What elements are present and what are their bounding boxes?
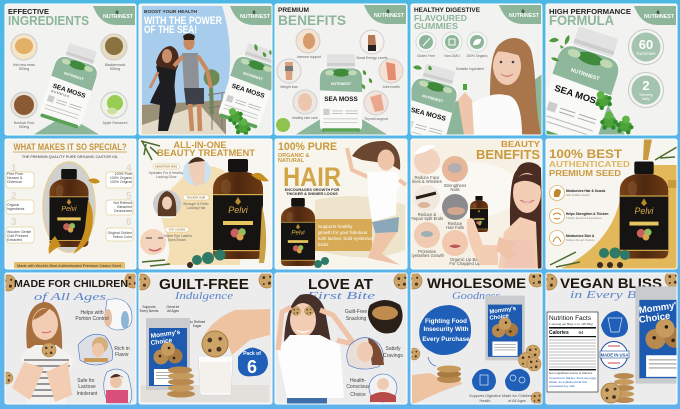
heading: effective ingredients: EFFECTIVE [8,7,49,16]
heading: in Every Bite [570,289,652,301]
heading: BEAUTY TREATMENT [157,148,255,159]
annotations [140,305,205,328]
heading: PREMIUM SEED [549,169,621,178]
benefit: split ends: Reduce & [418,212,436,217]
woman pointing at bottle [467,162,543,270]
badge: gluten free [416,32,436,58]
heading: GUILT-FREE [159,277,249,293]
callout: fighting food insecurity [419,305,471,355]
product bottle [534,23,628,151]
callout band: Supports healthy [318,224,353,229]
icon: children of all ages [502,369,532,403]
logo badge [499,5,541,24]
heading: THE PREMIUM QUALITY PURE ORGANIC CASTOR OIL [22,155,119,159]
feature 5: 5 [126,191,132,202]
callout: guilt-free snacking [345,300,403,333]
feature 2: Organic [7,203,20,207]
tag: smooth skin: Looking Glow [156,175,177,179]
logo badge: NUTRINEST [103,14,134,20]
panel: love at first bite [275,273,410,404]
panel: high performance formula [546,4,676,134]
benefit: moisturizes skin: Softens Rough Texture [566,238,595,242]
callout: satisfy cravings: Satisfy [385,346,401,352]
logo badge [634,6,676,25]
seal: made in USA: MADE IN USA [601,352,628,358]
benefit: reduce face lines: lines & Wrinkles [412,179,442,184]
logo badge: NUTRINEST [644,14,675,20]
heading [13,142,127,159]
leaves [413,65,432,70]
photo: woman [150,46,179,131]
product bottle: SEA MOSS [553,83,603,108]
heading: 100% pure organic natural: ORGANIC & [278,153,310,159]
arrow [428,357,436,366]
heading: Goodness [452,290,500,302]
heading: high performance formula [550,9,631,25]
benefit: organic lip balm: Organic Lip Balm [450,257,483,262]
heading: VEGAN BLISS [560,275,662,291]
feature 4: 4 [126,163,132,174]
callout: portion control: Portion Control [75,316,109,322]
heading: AUTHENTICATED [549,160,630,169]
benefit: moisturizes skin [550,230,595,246]
gummy bears [591,88,635,135]
benefit: split ends: Repair Split Ends [411,216,443,221]
annotations: All Ages [167,309,179,313]
badge: gluten free: Gluten Free [417,54,435,58]
feature 4 [106,163,133,188]
cookies [406,271,545,404]
benefit: eyelashes growth [410,222,445,258]
feature 2: Ingredients [7,207,25,211]
heading: hair: ENCOURAGES GROWTH FOR [285,188,340,192]
tag: smooth skin: Hydrates For A Healthy [149,171,184,175]
product bottle [40,44,97,128]
callout: pack of 6: 6 [247,357,257,377]
plant and seeds [550,147,677,268]
product packet [146,318,190,390]
oil splash [49,178,100,254]
product bottle: Pelvi [61,206,77,213]
product bottle: SEA MOSS [231,83,265,100]
heading [305,277,375,302]
benefit: reduce face lines [412,145,442,184]
benefit: organic lip balm: For Chapped Lips [449,261,483,266]
callout: health-conscious choice: Health- [350,378,366,384]
feature 1: 1 [11,163,17,174]
tag: thicker hair: THICKER HAIR [187,196,205,200]
benefit: immune support: Immune support [297,55,321,59]
callout: 60 gummies: Gummies [636,51,656,56]
tag: thicker hair: Looking Hair [186,206,206,210]
benefit: hair falls: Hair Falls [446,225,464,230]
benefit: strengthens brows: Helps Strengthen & Thicken [566,212,609,216]
heading: 100% pure organic natural: NATURAL [278,158,305,164]
product bottle: NUTRINEST [63,71,85,82]
benefit: moisturizes skin: Moisturizes Skin & [566,234,595,238]
product bottle: NUTRINEST [331,82,352,86]
panel: made for children [0,272,141,404]
heading: First Bite [305,290,375,302]
feature 6: Yellow Color [113,235,133,239]
feature 1: Chemical [7,180,22,184]
annotations: No Refined [189,320,205,324]
icon: vegan mark [601,311,628,338]
callout: guilt-free snacking: Guilt-Free [345,309,367,315]
woman holding gummy: Suitable Ingredient [456,67,484,71]
tag: eye lashes [162,227,192,242]
heading: effective ingredients: INGREDIENTS [8,14,89,28]
milk glass [198,356,233,395]
heading: effective ingredients [8,9,89,25]
tag: eye lashes: Eyes Brows [168,238,186,242]
callout: 60 gummies [628,30,664,64]
heading: boost your health: OF THE SEA! [144,24,197,36]
product packet: Choice [150,337,173,347]
benefit: strengthens brows [550,208,609,224]
product bottle: SEA MOSS [324,96,358,103]
panel: effective ingredients [5,4,136,135]
product bottle [320,54,362,132]
badge: non-GMO: Non-GMO [444,54,460,58]
benefit: thyroid support: Thyroid support [364,117,388,121]
panel: best authenticated premium seed [546,139,677,269]
icon: children of all ages: Made for Children [502,394,532,398]
annotations: Supports [142,305,156,309]
logo badge [230,6,272,25]
seal: made in USA [600,342,629,368]
product packet [485,296,525,360]
heading [549,147,630,178]
tag: smooth skin [149,164,184,179]
feature 5 [106,191,133,215]
product bottle: Pelvi [635,206,655,216]
product bottle: SEA MOSS [52,83,86,100]
heading: premium benefits [278,8,346,25]
feature 1 [6,163,34,188]
product packet: Mommy's [489,306,517,316]
apple and leaves [276,70,372,132]
feature 6: Original Golden [108,231,132,235]
heading: LOVE AT [308,277,373,293]
benefit: split ends [411,185,443,221]
callout: lactose intolerant: Lactose [78,384,96,390]
cookie stack [601,373,634,403]
benefit: moisturizes hair [550,186,606,200]
callout: satisfy cravings: Cravings [383,353,403,359]
nutrition facts label: wheat, as explained that this [549,380,587,384]
callout band: lush lashes, bold eyebrows [318,236,374,241]
logo badge: NUTRINEST [374,13,405,19]
heading [560,275,662,301]
heading [476,140,541,162]
callout: pack of 6: Pack of [243,351,261,357]
feature 5: Not Refined [114,201,132,205]
annotations: Sugar [193,324,202,328]
nutrition facts label: Calories [549,330,569,336]
callout band: growth for your fabulous [318,230,368,235]
cookies [0,272,141,384]
product bottle: NUTRINEST [242,71,264,82]
benefit: hair falls [442,194,468,230]
heading: BENEFITS [476,147,540,162]
product packet [635,286,680,384]
product bottle [218,44,272,128]
heading: healthy digestive flavoured gummies: GUMMIES [414,21,458,31]
nutrition facts label: 1 serving per Bag: 1 oz. (28.35g) [549,322,593,326]
product bottle: NUTRINEST [570,67,601,83]
panel: premium benefits [275,4,407,135]
leaves [549,35,570,61]
feature 1: Hexane & [7,176,23,180]
ingredient: irish sea moss: Irish sea moss [13,63,35,67]
panel: what makes it so special [5,139,136,269]
heading: 100% pure organic natural: 100% PURE [278,141,337,153]
heading [427,275,526,302]
panel: pure hair [275,139,407,269]
callout: health-conscious choice: Conscious [346,384,370,390]
annotations: Every Needs [140,309,159,313]
tag: smooth skin: SMOOTHER SKIN [155,164,177,168]
benefit: eyelashes growth: Eyelashes Growth [410,253,445,258]
callout: rich in flavor [78,334,130,365]
tag: eye lashes: Thicker Eye Lashes [162,234,192,238]
product bottle: Pelvi [228,205,249,215]
feature 6: 6 [126,217,132,228]
heading [157,140,255,159]
photo: man [174,34,211,131]
panel: beauty treatment [139,139,272,269]
benefit: joint health: Joint health [382,85,400,89]
product bottle [470,196,488,232]
benefit: boost energy levels: Boost Energy Levels [356,56,388,60]
heading: Indulgence [174,290,233,302]
callout: 2 serving daily: 2 [642,78,650,93]
woman with cookies [277,294,355,404]
benefit: moisturizes hair: Hair Follicle Health [566,193,590,197]
ingredient: bladderwrack: Bladderwrack [105,63,126,67]
heading: high performance formula: HIGH PERFORMANCE [549,9,631,16]
callout: rich in flavor: Rich in [114,346,130,352]
callout: lactose intolerant [77,369,132,403]
cookie stack [167,366,195,398]
icon: children of all ages: of All Ages [508,399,526,403]
callout: lactose intolerant: Safe for [77,378,95,384]
heading: healthy digestive flavoured gummies: FLAVOURED [414,13,467,23]
heading: premium benefits: PREMIUM [278,8,309,14]
nutrition facts label: Not a significant source of vitamins [549,371,593,375]
heading: boost your health [144,10,222,33]
feature 3: Wooden Gentle [7,230,31,234]
callout: pack of 6 [238,348,268,377]
benefit: strengthens brows: Thicker Eyebrows Eyelashes [566,216,603,220]
feature 3: Cold Pressed [7,234,28,238]
product packet: Choice [638,311,671,326]
callout: lactose intolerant: Intolerant [77,391,98,397]
benefit: strengthens nails [442,156,468,192]
ingredient: bladderwrack: 500mg [110,67,120,71]
callout: health-conscious choice: Choice [350,392,366,398]
benefit: healthy skin care: healthy skin care [292,116,318,120]
product packet: Mommy's [150,329,181,340]
ingredient: burdock root [11,92,37,129]
panel: healthy digestive gummies [412,4,542,134]
footer banner: Made with World's Best Authenticated Premium Castor Seed [17,263,121,268]
callout: satisfy cravings [347,338,403,369]
heading: premium benefits: BENEFITS [278,12,346,28]
nutrition facts label [547,312,598,392]
product bottle: SEA MOSS [410,107,447,123]
callout: portion control: Helps with [80,310,104,316]
nutrition facts label: Nutrition Facts [549,315,592,322]
feature 3: Extracted [7,238,22,242]
callout band [315,219,374,251]
benefit: hair falls: Reduce [448,221,463,226]
badge: non-GMO [442,32,462,58]
benefit: strengthens nails: Strengthens [444,183,466,188]
feature 6 [106,217,133,241]
product bottle: GUMMIES [51,89,70,99]
feature 5: Deodorized [114,209,132,213]
heading [159,277,249,302]
panel: power of the sea [139,4,283,136]
logo badge: NUTRINEST [240,14,271,20]
icon: digestive health: Supports Digestive [469,394,501,398]
feature 3 [6,217,34,243]
leaf [141,141,160,160]
heading: ALL-IN-ONE [174,140,226,150]
feature 4: 100% Pure [115,172,132,176]
callout: guilt-free snacking: Snacking [346,316,366,322]
panel: wholesome goodness [406,271,545,404]
badge: 100% organic: 100% Organic [466,54,488,58]
heading: of All Ages [34,291,106,303]
heading: MADE FOR CHILDREN [14,279,128,290]
feature 5: Bleached [117,205,132,209]
feature 4: 100% Organic [110,176,132,180]
woman holding gummy [456,38,541,135]
heading: boost your health: BOOST YOUR HEALTH [144,9,198,14]
callout: fighting food insecurity: Fighting Food [425,318,467,325]
heading: 100% pure organic natural [278,141,337,164]
cookies [541,271,680,290]
ingredient: burdock root: 500mg [19,125,29,129]
heading: boost your health: WITH THE POWER [144,15,222,27]
ingredient: apple flavoured: Apple Flavoured [103,121,127,125]
cookies [134,272,275,290]
cookie pile [518,345,541,371]
callout: 2 serving daily: Serving [639,92,653,97]
feature 4: 100% Original [110,180,132,184]
heading: hair: THICKER & SHINIER LOOKS [286,192,338,196]
product bottle [412,64,456,134]
heading: hair: HAIR [283,162,341,192]
feature 1: Free From [7,172,23,176]
annotations: Great for [166,305,180,309]
portrait: lashes [140,229,166,255]
nutrition facts label: processed soy milk. [549,384,576,388]
feature 3: 3 [11,217,17,228]
callout: 2 serving daily: daily [642,96,650,101]
tag: thicker hair: Stronger & Fuller [183,202,210,206]
ingredient: irish sea moss: 500mg [19,67,29,71]
heading: WHOLESOME [427,275,526,291]
callout: 2 serving daily [628,72,664,108]
panel: vegan bliss [541,271,680,404]
panel: guilt-free [134,272,275,404]
benefit: reduce face lines: Reduce Face [415,175,440,180]
benefit: organic lip balm [442,230,483,266]
heading: healthy digestive flavoured gummies [414,8,480,31]
callout: rich in flavor: Flavor [115,352,129,358]
nutrition facts label: 94 [578,330,584,335]
product packet: Choice [489,313,510,322]
gummies [228,44,272,134]
ingredient: irish sea moss [11,34,37,71]
icon: digestive health [469,369,501,403]
heading: 100% BEST [549,147,623,161]
cookies on hand [412,366,462,404]
feature 2: 2 [11,191,17,202]
tag: thicker hair [183,195,210,210]
ring [43,162,95,252]
girl holding cookie [12,302,74,403]
benefit: weight loss: Weight loss [280,85,298,89]
cookie in hand [202,309,270,357]
feature 2 [6,191,34,214]
heading: BEAUTY [501,140,541,149]
badge: 100% organic [466,32,488,58]
benefit: eyelashes growth: Promotes [418,249,436,254]
portrait: hair [153,190,181,218]
benefit: strengthens nails: Nails [450,187,460,192]
ingredient: bladderwrack [101,34,127,71]
callout: fighting food insecurity: Every Purchase [422,336,470,343]
jumping woman [347,141,406,265]
ingredient: burdock root: Burdock Root [14,121,34,125]
logo badge: NUTRINEST [509,13,540,19]
benefit: moisturizes hair: Moisturizes Hair & Scouts [566,189,606,193]
product bottle: NUTRINEST [421,94,444,104]
tag: eye lashes: EYE LASHES [169,228,185,232]
heading: high performance formula: FORMULA [549,12,614,28]
product bottle: Pelvi [291,230,305,237]
nutrition facts label: Consumers: Ma'am, there are eggs, [549,376,597,380]
heading: healthy digestive flavoured gummies: HEALTHY DIGESTIVE [414,8,480,14]
oil and seeds [142,173,269,268]
portrait: smooth skin [183,157,211,186]
panel: beauty benefits [410,139,543,270]
callout: fighting food insecurity: Insecurity With [423,326,469,333]
callout: health-conscious choice [346,374,397,402]
icon: digestive health: Health [480,399,490,403]
seeds [314,257,329,268]
callout band: locks [318,242,329,247]
heading [14,279,128,303]
heading: WHAT MAKES IT SO SPECIAL? [14,142,127,152]
callout: portion control [75,299,132,330]
callout: 60 gummies: 60 [639,37,653,52]
